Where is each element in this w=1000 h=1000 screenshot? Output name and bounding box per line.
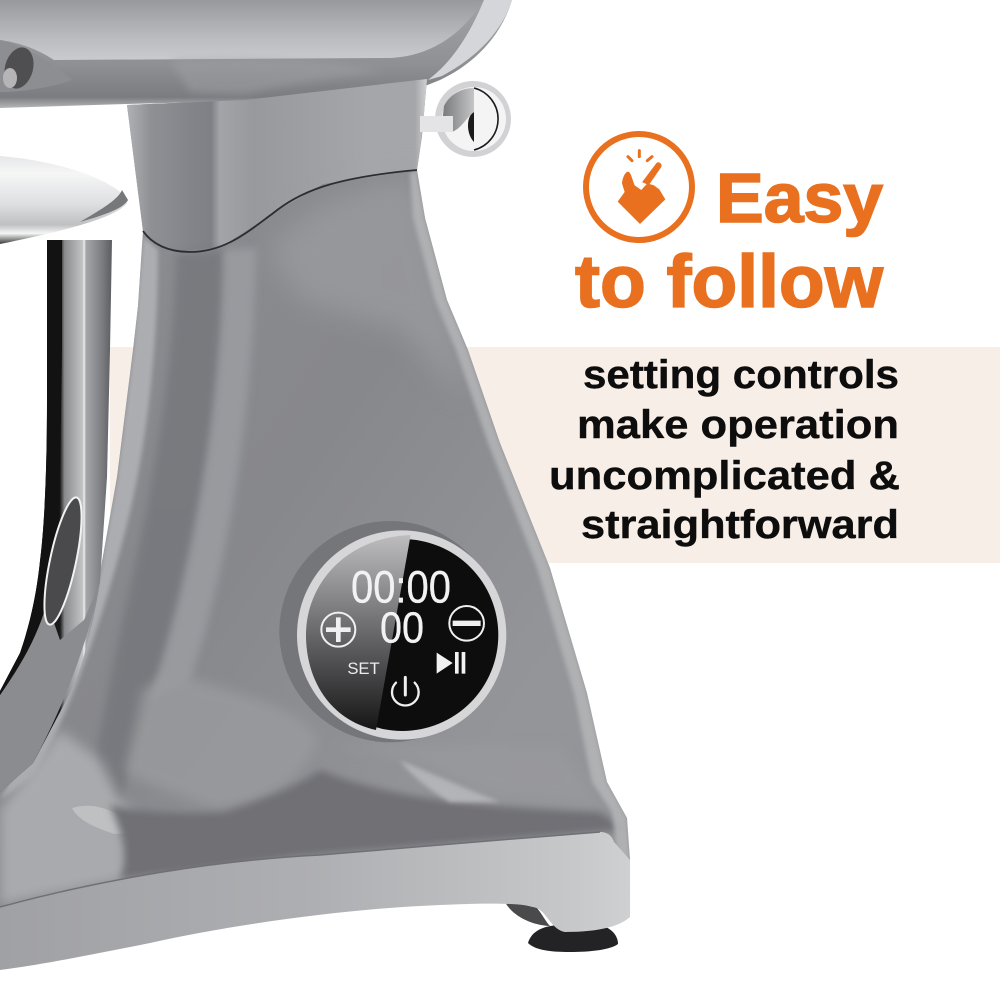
play pause xyxy=(437,652,465,674)
base front lip xyxy=(0,832,630,970)
chrome ring xyxy=(297,530,506,740)
SET label: SET xyxy=(347,659,380,678)
foot right xyxy=(528,925,618,952)
stand mixer product photo xyxy=(0,0,630,970)
hand palm xyxy=(618,172,665,224)
mixer neck and body xyxy=(0,79,630,930)
black glass xyxy=(306,539,498,731)
lower right pale area xyxy=(330,745,600,805)
panel: text background band xyxy=(110,347,1000,563)
inner foot shadow xyxy=(505,902,550,926)
mixer head shell xyxy=(0,0,512,108)
power button xyxy=(392,677,419,706)
bowl lower reflection xyxy=(0,582,100,792)
neck seam xyxy=(143,170,417,252)
description text: setting controls xyxy=(583,353,899,397)
small pale fleck xyxy=(72,806,122,834)
body right edge highlight xyxy=(410,170,630,860)
base top edge line xyxy=(0,832,600,907)
bowl xyxy=(0,156,128,792)
bowl steel wall xyxy=(0,240,112,792)
heading xyxy=(575,159,883,323)
index finger xyxy=(643,163,661,185)
minus button xyxy=(449,606,484,641)
lower left pale area xyxy=(0,730,130,906)
panel side shadow xyxy=(279,521,501,742)
pale reflection under panel xyxy=(400,760,500,802)
heading line 1: Easy xyxy=(716,159,883,237)
glass reflection xyxy=(306,535,411,730)
description text: make operation xyxy=(577,403,899,447)
left light edge xyxy=(0,236,158,800)
speed digits: 00 xyxy=(380,605,424,653)
tap marks xyxy=(628,151,652,161)
control panel xyxy=(279,521,506,742)
bowl oval opening xyxy=(37,495,89,627)
heading line 2: to follow xyxy=(575,240,883,323)
bowl interior white xyxy=(0,240,47,691)
knob xyxy=(420,81,511,157)
bowl rim xyxy=(0,156,128,244)
lighter right shoulder xyxy=(280,183,452,363)
body shading, clipped to silhouette xyxy=(0,75,630,905)
knob stem xyxy=(420,116,453,132)
description text: uncomplicated & xyxy=(549,454,900,498)
plus button xyxy=(321,613,355,647)
lower centre pale reflection xyxy=(124,681,310,804)
dark base well xyxy=(110,770,625,880)
heading icon: tapping hand in circle xyxy=(586,134,692,240)
description text xyxy=(549,353,900,547)
neck upper housing xyxy=(120,75,430,252)
bowl black strip xyxy=(0,240,62,695)
dark curved band xyxy=(88,250,224,800)
timer digits: 00:00 xyxy=(351,561,451,612)
curved light band xyxy=(150,248,256,700)
description text: straightforward xyxy=(581,503,899,547)
